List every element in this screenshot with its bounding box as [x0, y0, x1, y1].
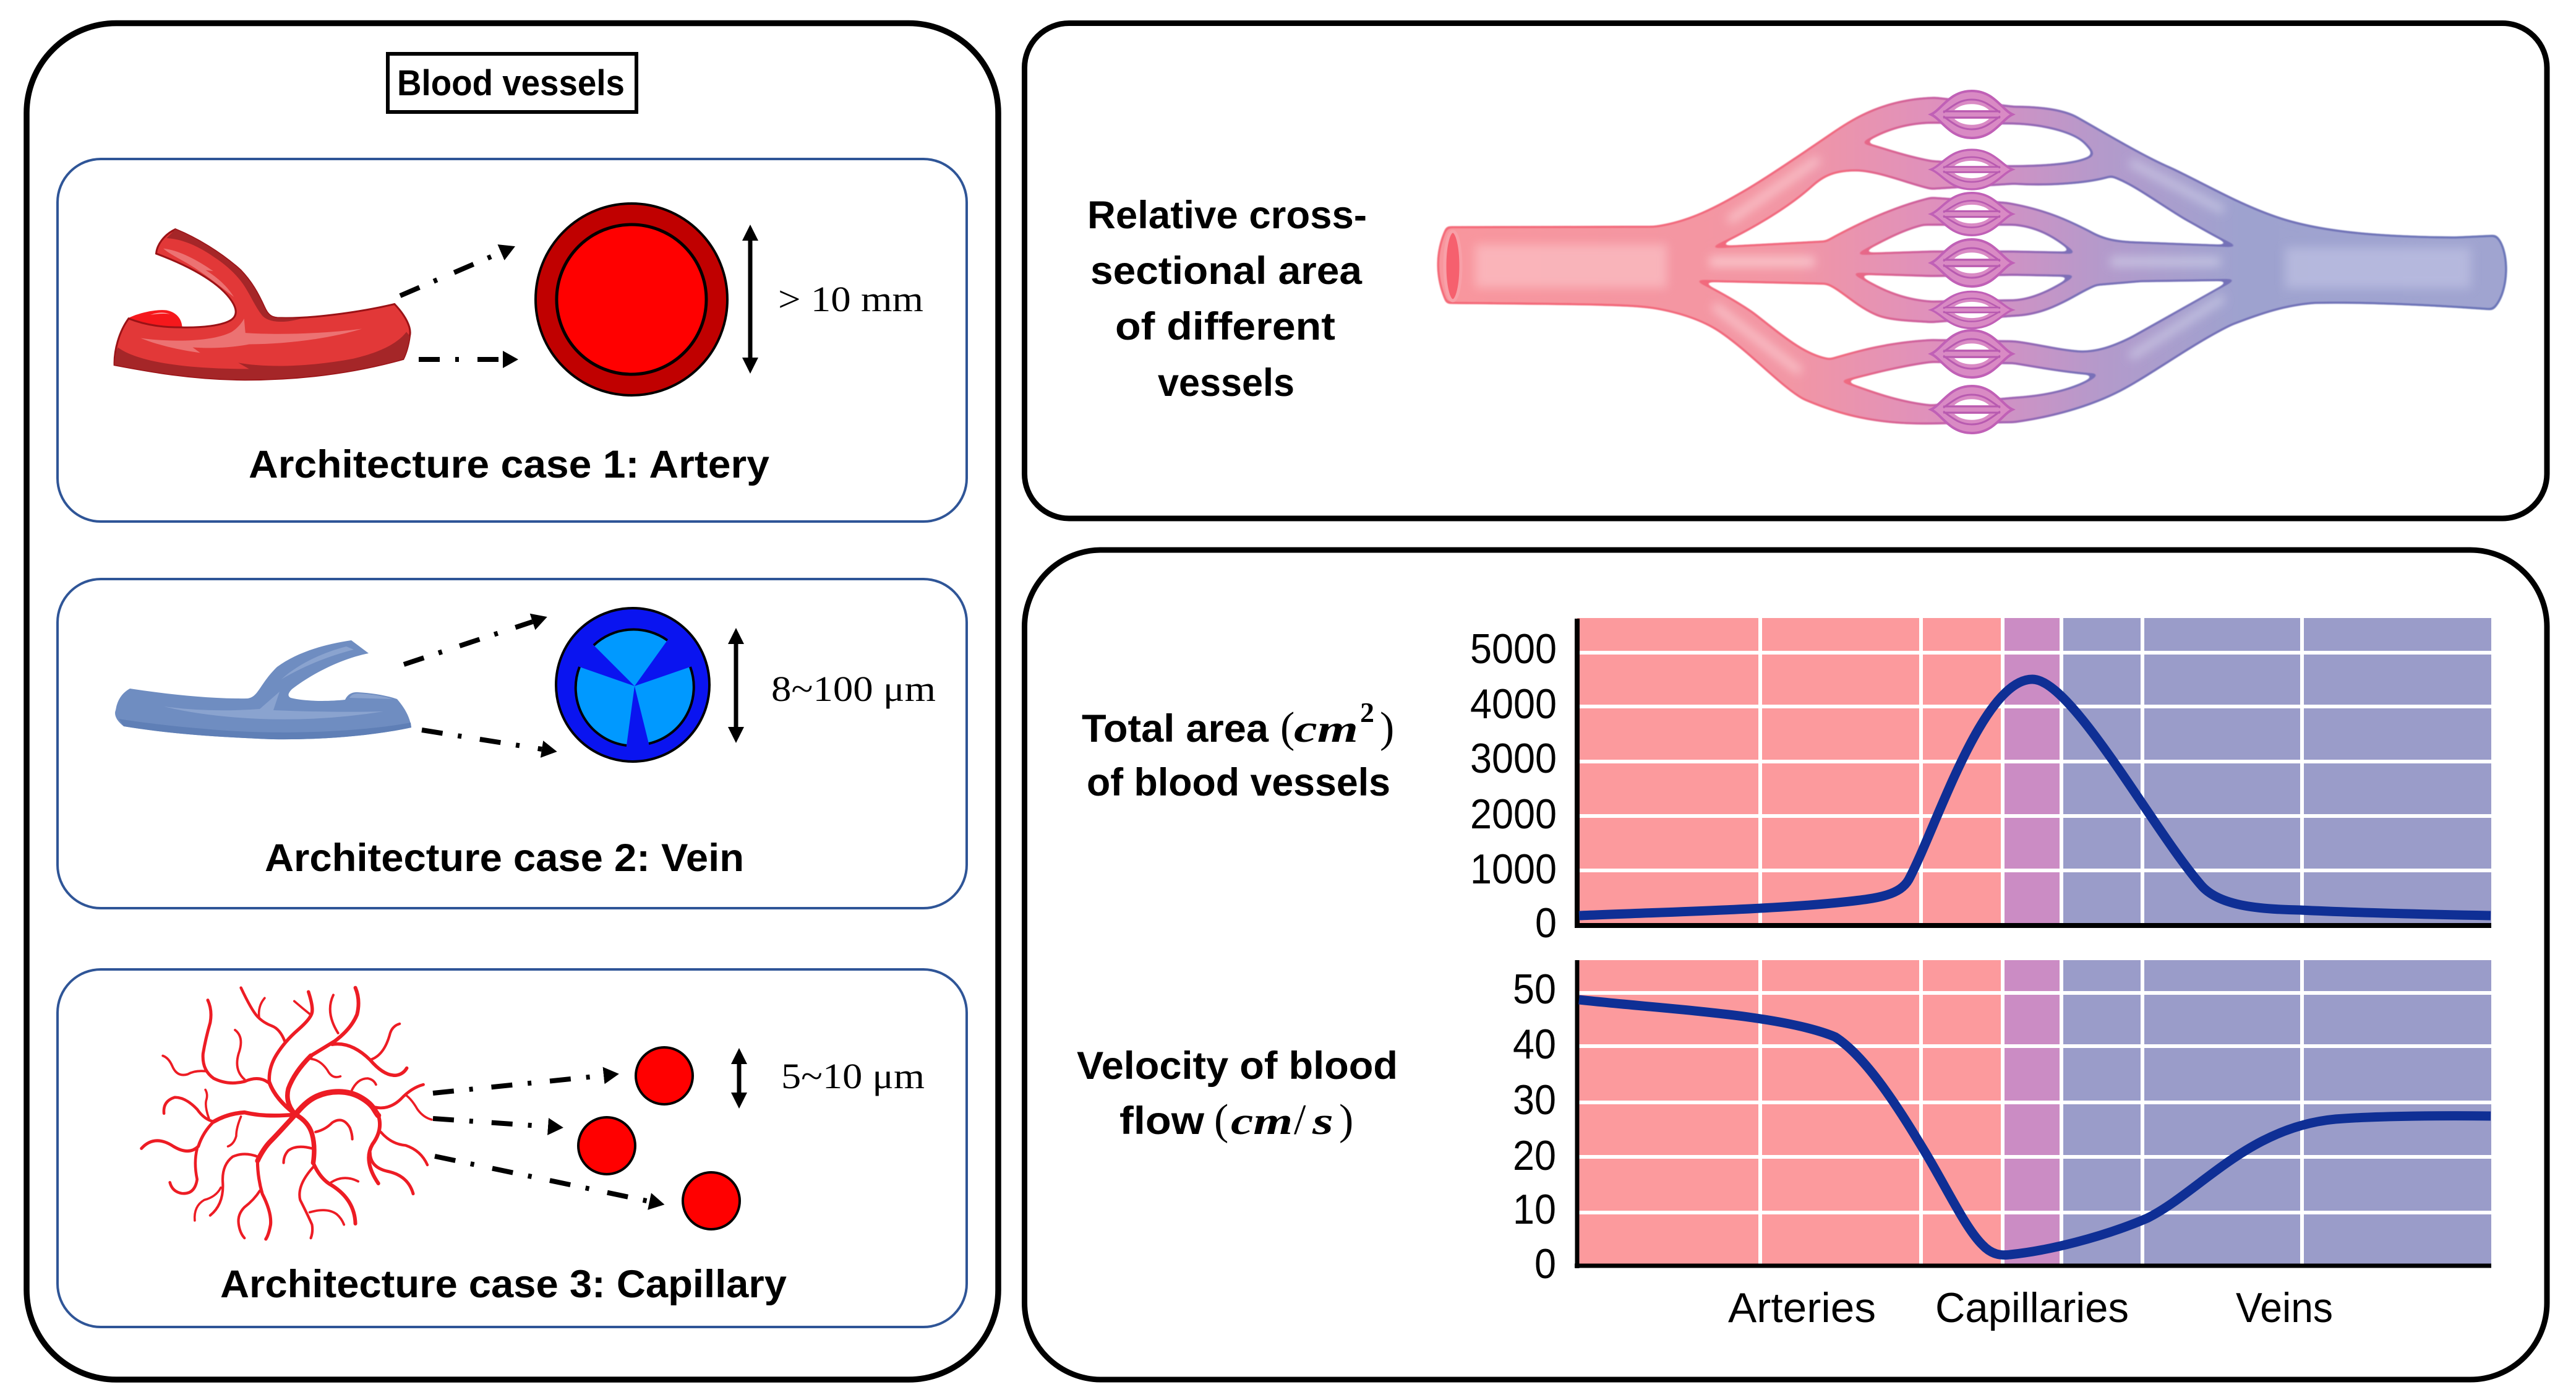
y axis labels: area: 5000 [1470, 625, 1557, 672]
label: velocity: / [1294, 1096, 1306, 1144]
y axis labels: velocity [1513, 966, 1556, 1287]
y axis labels: area: 1000 [1470, 846, 1557, 893]
y axis labels: velocity: 40 [1513, 1021, 1556, 1068]
x axis labels: Veins [2236, 1284, 2333, 1331]
y axis labels: area: 4000 [1470, 681, 1557, 728]
arrow: artery upper [400, 252, 501, 296]
text: relative cross-sectional area: of different [1115, 305, 1335, 348]
diagram: vessel network [1439, 91, 2505, 433]
y axis labels: velocity: 20 [1513, 1132, 1556, 1179]
icon: vein vessel [115, 640, 411, 739]
arrow: capillary middle [433, 1119, 548, 1127]
panel: architecture case 3 capillary [58, 969, 967, 1327]
text: relative cross-sectional area [1087, 194, 1367, 405]
vessel opening [1445, 231, 1461, 301]
label: total area: cm [1294, 708, 1358, 750]
chart: velocity [1513, 960, 2491, 1287]
caption: case 2: Architecture case 2: Vein [265, 836, 744, 880]
text: relative cross-sectional area: vessels [1158, 361, 1294, 405]
x axis labels: Arteries [1728, 1284, 1876, 1331]
arrow: artery diameter [748, 240, 752, 358]
panel: area and velocity charts [1024, 550, 2547, 1380]
x axis labels [1728, 1284, 2333, 1331]
caption: case 1: Architecture case 1: Artery [249, 443, 769, 486]
line: velocity curve [1579, 1000, 2491, 1255]
icon: capillary cross-sections [578, 1047, 740, 1229]
panel: blood vessels overview [27, 24, 998, 1380]
label: velocity: s [1312, 1101, 1333, 1143]
chart: total area [1470, 618, 2491, 947]
label: velocity: ( [1214, 1096, 1228, 1144]
x axis labels: Capillaries [1935, 1284, 2129, 1331]
y axis labels: area: 3000 [1470, 735, 1557, 782]
icon: artery cross-section [536, 204, 727, 395]
y axis labels: velocity: 50 [1513, 966, 1556, 1013]
icon: artery vessel [114, 230, 410, 380]
panel: architecture case 2 vein [58, 579, 967, 908]
label: total area: of blood vessels [1087, 761, 1390, 804]
y axis labels: area: 2000 [1470, 791, 1557, 838]
icon: vein cross-section with valves [556, 608, 709, 762]
text: capillary size: 5~10 μm [781, 1056, 925, 1096]
line: area curve [1579, 679, 2491, 916]
y axis labels: velocity: 30 [1513, 1076, 1556, 1123]
text: relative cross-sectional area: Relative cross- [1087, 194, 1367, 237]
label: total area: ( [1280, 704, 1294, 752]
text: vein size: 8~100 μm [771, 669, 936, 709]
heading: Blood vessels [388, 54, 636, 112]
arrow: vein diameter [734, 643, 738, 728]
y axis labels: velocity: 10 [1513, 1186, 1556, 1233]
arrow: capillary lower [435, 1156, 649, 1201]
arrow: artery lower [419, 357, 503, 362]
label: velocity: cm [1231, 1101, 1293, 1143]
label: velocity [1077, 1044, 1398, 1144]
panel: architecture case 1 artery [58, 159, 967, 522]
text: relative cross-sectional area: sectional area [1090, 249, 1363, 293]
highlights [1475, 159, 2471, 372]
label: total area: Total area [1082, 707, 1269, 750]
label: total area: 2 [1360, 697, 1374, 728]
label: velocity: flow [1119, 1099, 1205, 1143]
label: total area [1082, 697, 1394, 804]
text: artery size: > 10 mm [778, 279, 923, 319]
arrow: vein lower [422, 730, 542, 749]
panel: relative cross-sectional area [1024, 24, 2547, 518]
label: velocity: Velocity of blood [1077, 1044, 1398, 1088]
label: total area: ) [1380, 704, 1394, 752]
capillary beds [1931, 91, 2013, 433]
y axis labels: velocity: 0 [1534, 1240, 1556, 1287]
arrow: vein upper [404, 622, 533, 664]
arrow: capillary upper [433, 1075, 604, 1093]
y axis labels: area: 0 [1535, 900, 1557, 947]
y axis labels: area [1470, 625, 1557, 947]
label: velocity: ) [1339, 1096, 1353, 1144]
icon: capillary network [142, 988, 432, 1239]
arrow: capillary diameter [737, 1063, 741, 1093]
heading: Blood vessels: Blood vessels [397, 63, 625, 103]
caption: case 3: Architecture case 3: Capillary [220, 1263, 787, 1306]
